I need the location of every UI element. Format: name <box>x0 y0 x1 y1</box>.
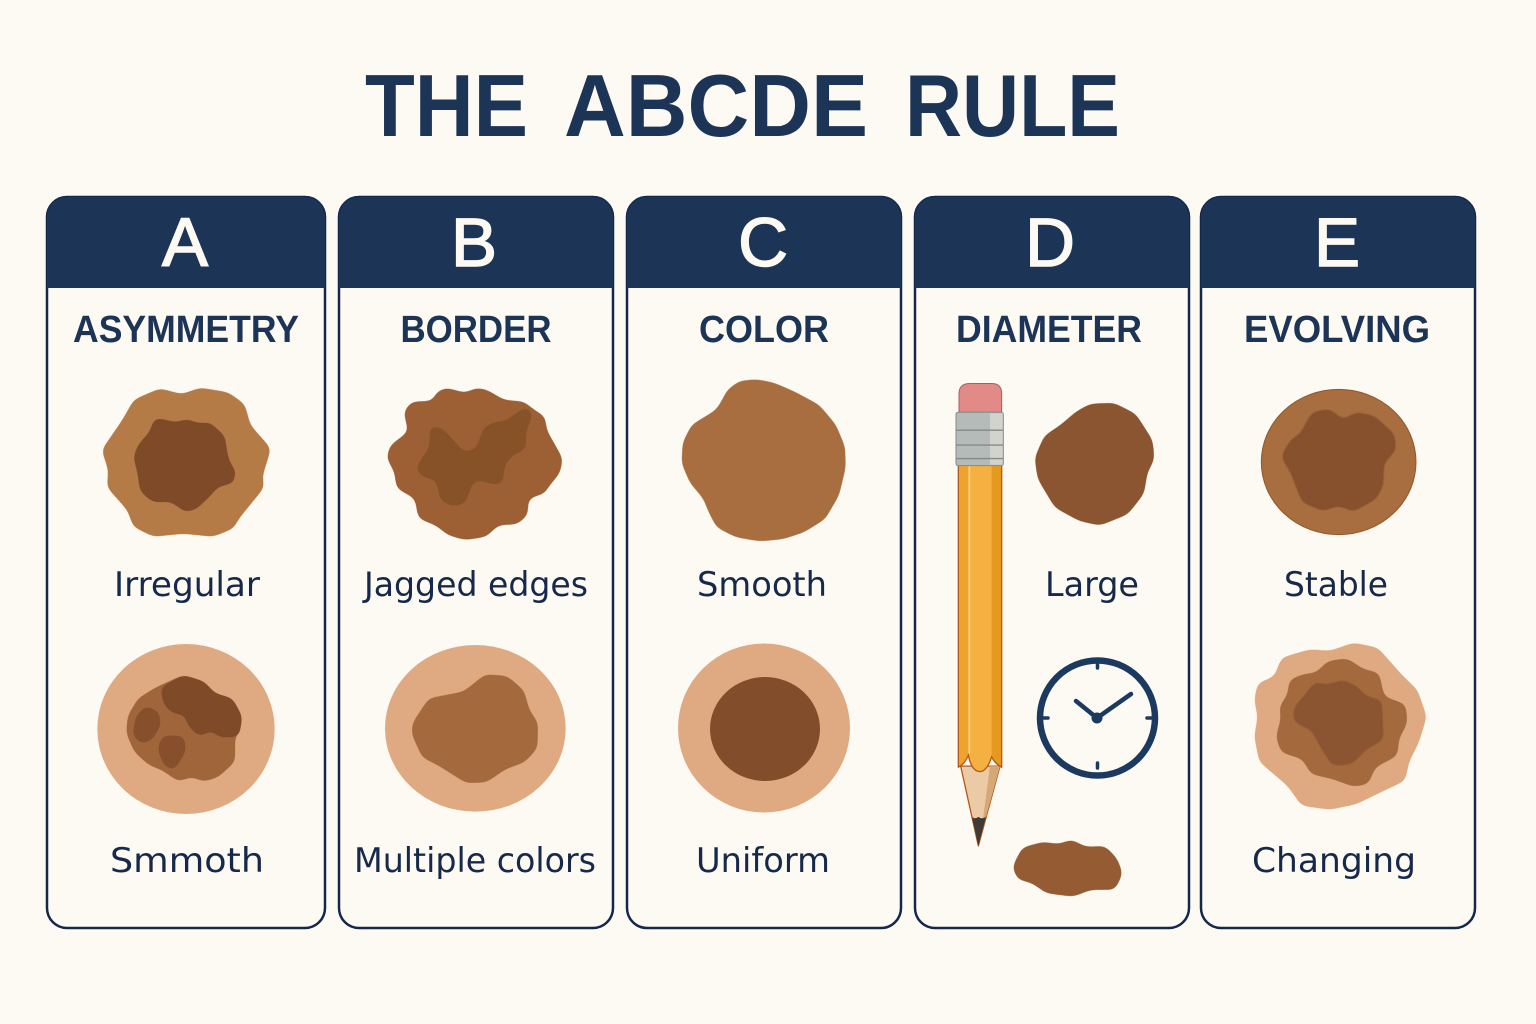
label: smooth: Smmoth <box>110 841 264 881</box>
heading: diameter: DIAMETER <box>956 309 1142 351</box>
mole: jagged <box>386 387 563 540</box>
mole: smooth <box>681 379 846 542</box>
label: large: Large <box>1045 565 1139 605</box>
heading: color: COLOR <box>699 309 829 351</box>
mole: irregular <box>101 387 271 537</box>
label: jagged edges: Jagged edges <box>362 565 588 605</box>
letter D: D <box>1025 204 1075 281</box>
title: THE <box>365 56 528 155</box>
panel: C color <box>627 197 901 928</box>
mole: small <box>1012 839 1123 897</box>
label: uniform: Uniform <box>696 841 830 881</box>
label: multiple colors: Multiple colors <box>354 841 596 881</box>
mole: large <box>1034 402 1155 526</box>
panel: E evolving <box>1201 197 1475 928</box>
letter C: C <box>738 204 788 281</box>
mole: smooth <box>97 644 275 814</box>
panel: A asymmetry <box>47 197 325 928</box>
mole: stable <box>1261 389 1416 535</box>
title: ABCDE <box>564 56 868 155</box>
label: stable: Stable <box>1284 565 1388 605</box>
icon: pencil <box>956 384 1003 846</box>
icon: clock <box>1040 660 1155 776</box>
title <box>365 56 1120 155</box>
label: irregular: Irregular <box>114 565 260 605</box>
letter A: A <box>162 204 208 281</box>
title: RULE <box>905 56 1120 155</box>
panel: D diameter <box>915 197 1189 928</box>
mole: multiple colors <box>385 645 566 812</box>
panel: B border <box>339 197 613 928</box>
label: changing: Changing <box>1252 841 1416 881</box>
heading: evolving: EVOLVING <box>1244 309 1430 351</box>
letter E: E <box>1314 204 1360 281</box>
letter B: B <box>451 204 497 281</box>
mole: changing <box>1254 642 1427 810</box>
mole: uniform <box>678 644 850 812</box>
label: smooth: Smooth <box>697 565 827 605</box>
heading: border: BORDER <box>400 309 552 351</box>
heading: asymmetry: ASYMMETRY <box>73 309 299 351</box>
